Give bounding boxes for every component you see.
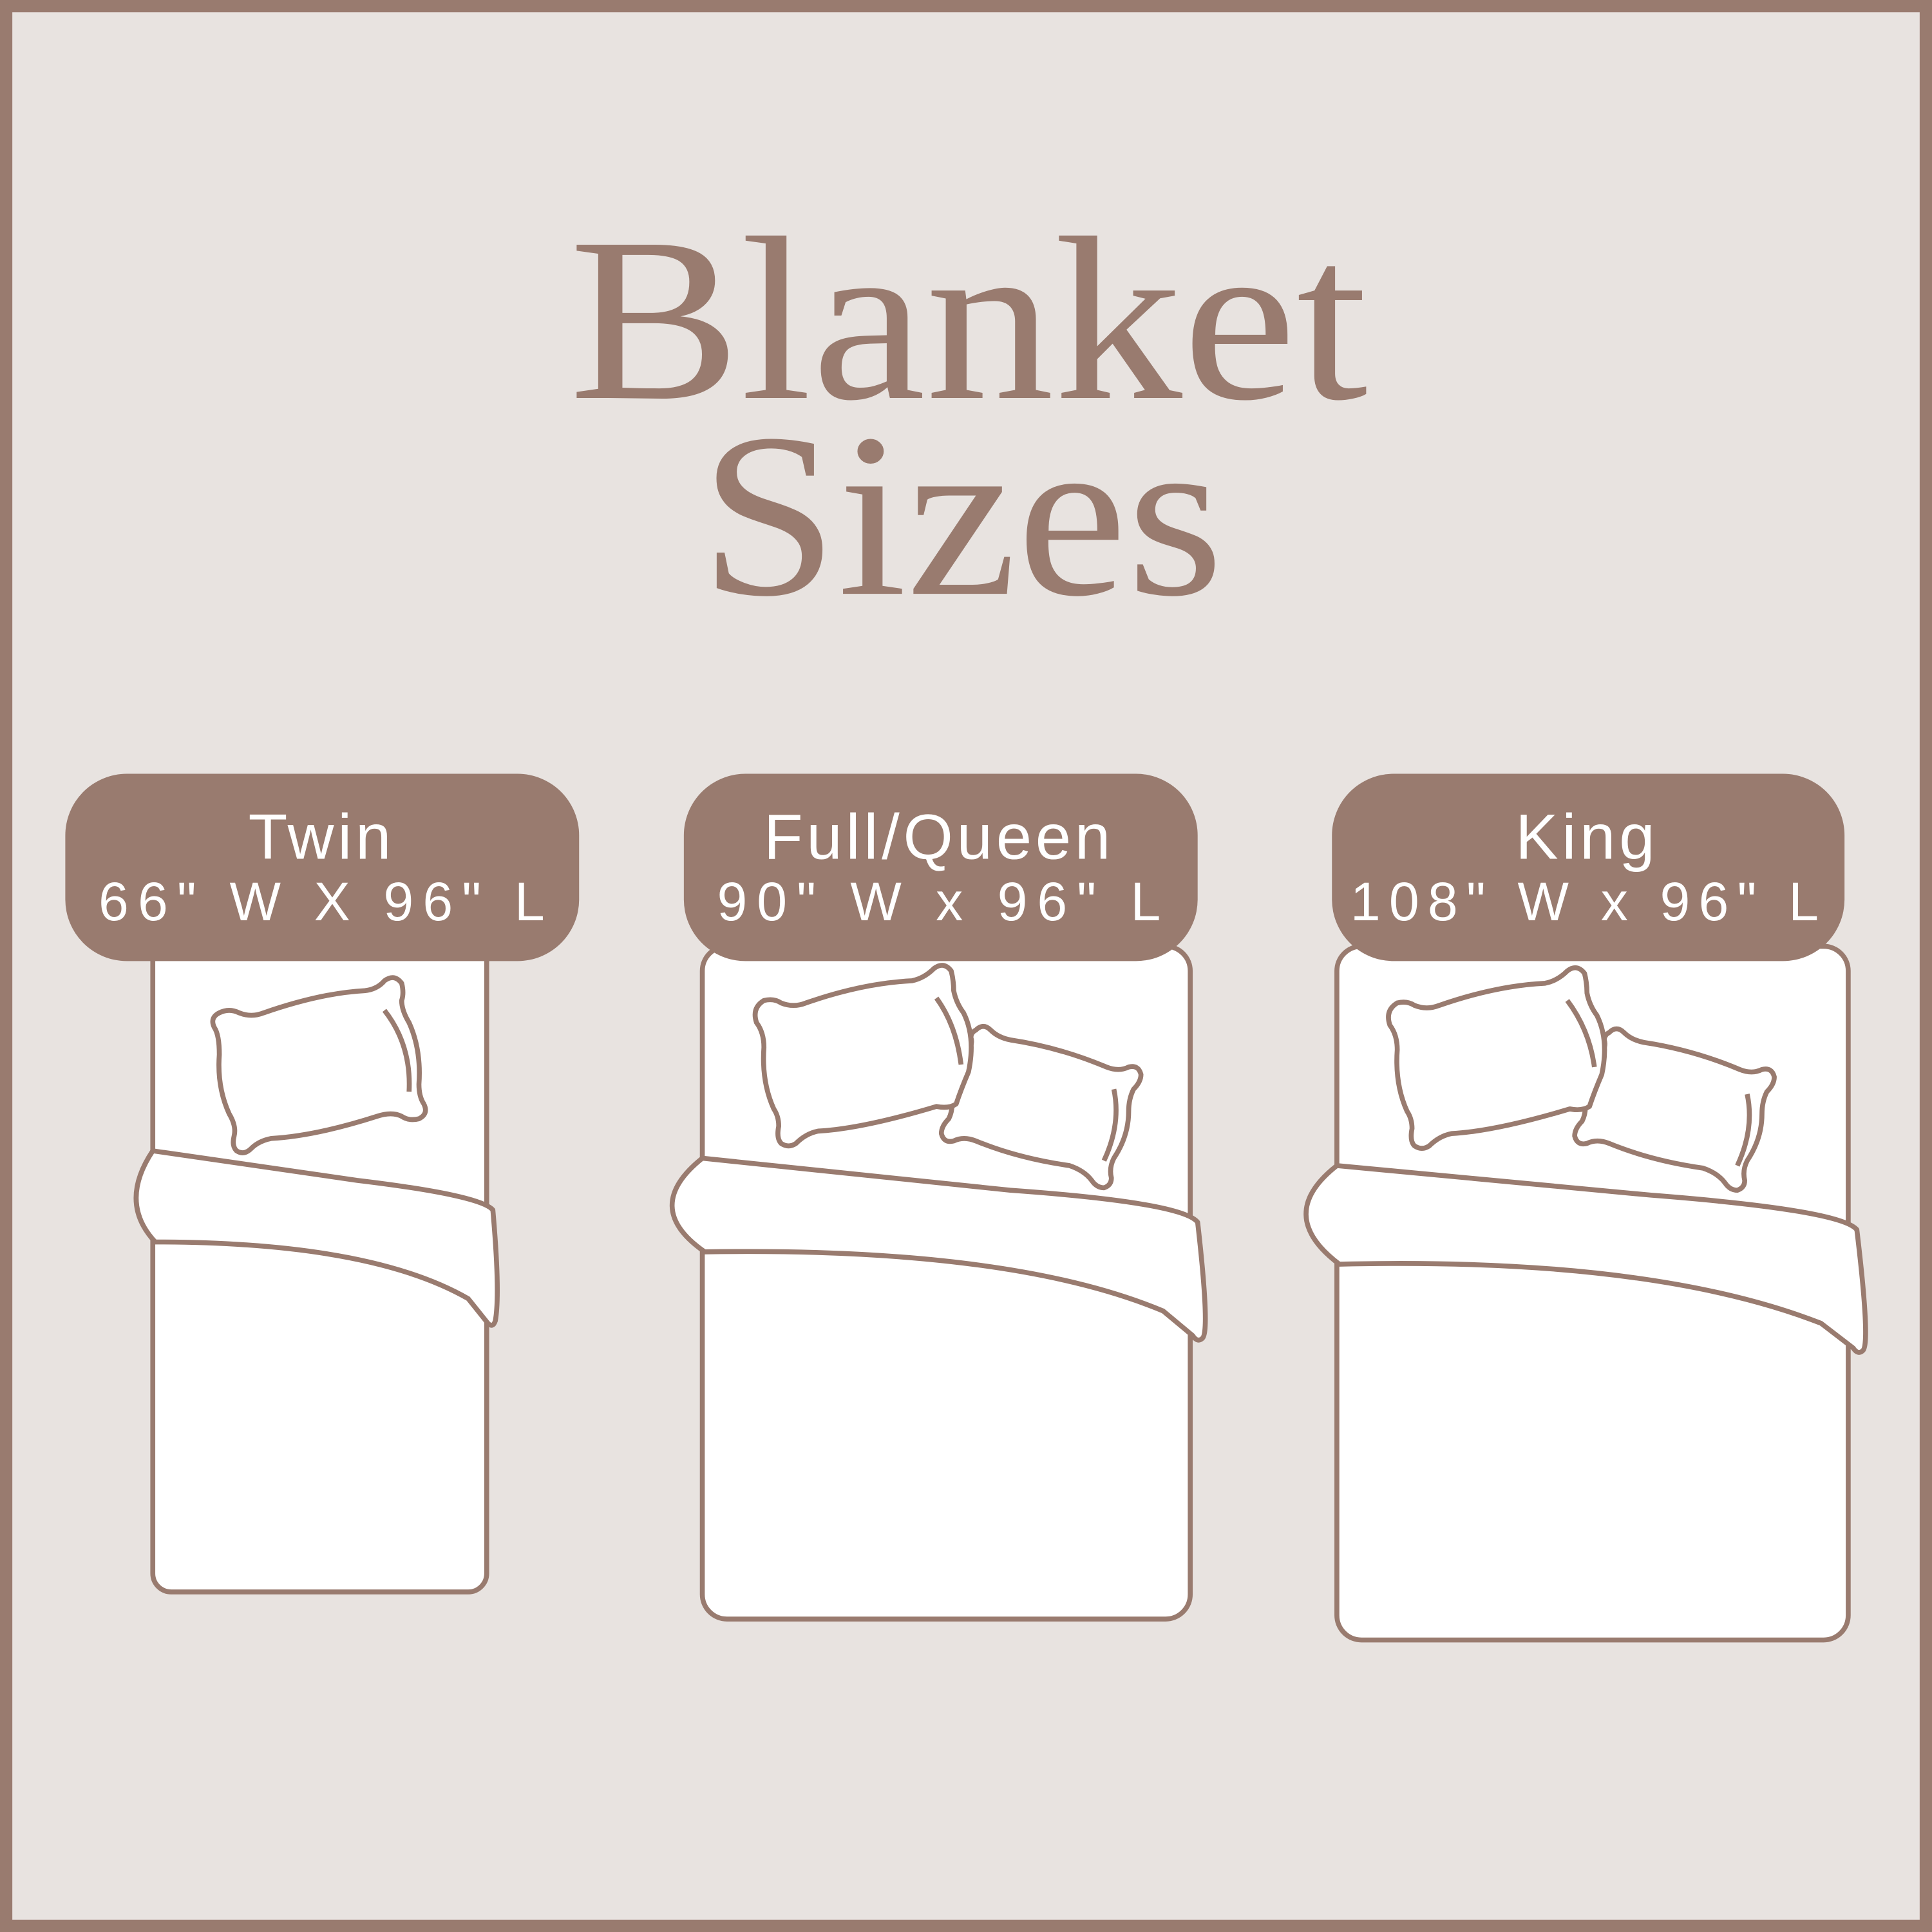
blanket: full/queen	[672, 1158, 1206, 1340]
header: full/queen: Full/Queen	[764, 802, 1114, 873]
blanket: twin	[136, 1151, 497, 1325]
header: twin	[65, 774, 579, 961]
header: full/queen: 90" W x 96" L	[717, 871, 1160, 932]
header: twin: Twin	[249, 802, 395, 873]
icon: pillow left	[755, 965, 971, 1146]
blanket: king	[1306, 1166, 1866, 1352]
title	[569, 189, 1368, 645]
panel: full/queen	[672, 946, 1206, 1619]
title: Blanket	[569, 189, 1368, 449]
header: full/queen	[684, 774, 1198, 961]
title: Sizes	[700, 385, 1224, 645]
bed: full/queen	[703, 946, 1190, 1619]
bed: twin	[153, 924, 487, 1592]
header: king: King	[1515, 802, 1658, 873]
icon: pillow right	[942, 1027, 1141, 1188]
icon: pillow right	[1575, 1029, 1774, 1190]
panel: king	[1306, 946, 1866, 1640]
bed: king	[1337, 946, 1848, 1640]
icon: twin pillow	[213, 978, 426, 1153]
header: king: 108" W x 96" L	[1350, 871, 1819, 932]
panel: twin	[136, 924, 497, 1592]
header: twin: 66" W X 96" L	[99, 871, 545, 932]
header: king	[1332, 774, 1844, 961]
icon: pillow left	[1388, 968, 1605, 1148]
